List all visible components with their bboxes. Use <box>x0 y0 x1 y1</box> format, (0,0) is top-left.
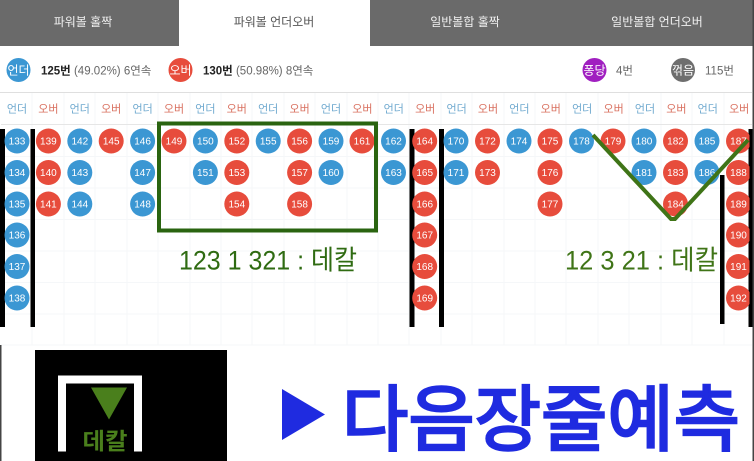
result balls: 154 <box>228 200 246 210</box>
result balls: 178 <box>573 136 590 148</box>
column headers <box>7 102 749 116</box>
result balls: 142 <box>71 136 89 148</box>
result balls: 169 <box>416 294 433 304</box>
result balls: 181 <box>636 168 653 179</box>
icon: green down triangle <box>91 388 127 420</box>
result balls: 187 <box>730 136 747 148</box>
icon: blue play arrow <box>282 389 325 440</box>
result balls: 182 <box>667 136 684 148</box>
badge: 언더 <box>6 58 30 82</box>
icon: white bracket <box>58 376 142 452</box>
column headers: 오버 <box>352 102 373 116</box>
label: 데칼: 데칼 <box>82 428 128 454</box>
result balls: 192 <box>730 294 747 304</box>
column headers: 언더 <box>258 102 278 116</box>
result balls: 174 <box>511 136 528 148</box>
column headers: 언더 <box>698 102 718 116</box>
column headers: 오버 <box>289 102 310 116</box>
summary row <box>6 58 734 82</box>
result balls: 173 <box>479 168 496 179</box>
result balls: 138 <box>9 294 26 304</box>
column headers: 언더 <box>635 102 655 116</box>
result balls: 161 <box>354 136 371 148</box>
tab: 일반볼합 언더오버: 일반볼합 언더오버 <box>611 15 703 29</box>
result balls: 156 <box>291 136 308 148</box>
result balls: 141 <box>40 200 57 210</box>
result balls: 163 <box>385 168 402 179</box>
column headers: 언더 <box>7 102 27 116</box>
result balls: 148 <box>134 200 151 210</box>
result balls: 158 <box>291 200 308 210</box>
result balls: 146 <box>134 136 151 148</box>
column headers: 오버 <box>478 102 498 116</box>
badge: 꺾음: 꺾음 <box>672 64 694 78</box>
result balls <box>4 128 751 310</box>
column headers: 오버 <box>101 102 121 116</box>
result balls: 185 <box>699 136 716 148</box>
column headers: 오버 <box>666 102 687 116</box>
green V mark <box>593 135 748 219</box>
decal icon panel <box>35 350 227 461</box>
annotation: 123 1 321 데칼: 123 1 321 : 데칼 <box>179 246 357 276</box>
stat: 오버 count: 130번 (50.98%) 8연속 <box>203 64 313 78</box>
result balls: 136 <box>9 230 26 242</box>
result balls: 137 <box>9 262 26 273</box>
result balls: 133 <box>9 136 26 148</box>
column headers: 언더 <box>321 102 341 116</box>
column headers: 언더 <box>132 102 153 116</box>
bar covers over right-hand balls <box>720 129 754 327</box>
green highlight box <box>159 124 376 230</box>
result balls: 153 <box>228 168 246 179</box>
badge: 퐁당 <box>582 58 606 82</box>
tab: 파워볼 언더오버: 파워볼 언더오버 <box>234 15 314 29</box>
badge: 오버: 오버 <box>169 64 192 78</box>
result balls: 183 <box>667 168 684 179</box>
result balls: 157 <box>291 168 308 179</box>
annotation: 12 3 21 데칼: 12 3 21 : 데칼 <box>565 246 718 276</box>
result balls: 172 <box>479 136 496 148</box>
result balls: 162 <box>385 136 402 148</box>
result balls: 149 <box>166 136 183 148</box>
result balls: 143 <box>71 168 89 179</box>
badge: 언더: 언더 <box>7 64 30 78</box>
result balls: 147 <box>134 168 151 179</box>
result balls: 177 <box>542 200 559 210</box>
column headers: 오버 <box>227 102 247 116</box>
column headers: 언더 <box>384 102 404 116</box>
result balls: 150 <box>197 136 214 148</box>
badge: 꺾음 <box>671 58 695 82</box>
tab: 파워볼 홀짝: 파워볼 홀짝 <box>54 15 112 29</box>
result balls: 155 <box>260 136 277 148</box>
result balls: 189 <box>730 200 747 210</box>
result balls: 175 <box>542 136 559 148</box>
result balls: 184 <box>667 200 684 210</box>
result balls: 139 <box>40 136 57 148</box>
result balls: 151 <box>197 168 214 179</box>
result balls: 168 <box>416 262 433 273</box>
tab: 일반볼합 홀짝: 일반볼합 홀짝 <box>430 15 500 29</box>
tab bar <box>0 0 754 46</box>
result balls: 180 <box>636 136 653 148</box>
column headers: 언더 <box>70 102 90 116</box>
result balls: 171 <box>448 168 465 179</box>
column headers: 오버 <box>603 102 624 116</box>
column headers: 오버 <box>729 102 749 116</box>
stat: 퐁당 count: 4번 <box>616 64 633 78</box>
result balls: 186 <box>699 168 716 179</box>
result balls: 170 <box>448 136 465 148</box>
result balls: 145 <box>103 136 120 148</box>
column headers: 오버 <box>415 102 435 116</box>
black divider bars <box>0 129 754 327</box>
column headers: 언더 <box>509 102 530 116</box>
column headers: 언더 <box>446 102 467 116</box>
result balls: 140 <box>40 168 57 179</box>
result balls: 164 <box>416 136 433 148</box>
result balls: 166 <box>416 200 433 210</box>
result balls: 134 <box>9 168 26 179</box>
column headers: 오버 <box>38 102 59 116</box>
result balls: 152 <box>228 136 246 148</box>
column headers: 언더 <box>572 102 592 116</box>
column headers: 언더 <box>195 102 216 116</box>
result balls: 167 <box>416 230 433 242</box>
result balls: 179 <box>605 136 622 148</box>
heading: 다음장줄예측: 다음장줄예측 <box>342 381 740 461</box>
badge: 퐁당: 퐁당 <box>583 64 606 78</box>
result balls: 176 <box>542 168 559 179</box>
result balls: 188 <box>730 168 747 179</box>
result balls: 135 <box>9 200 26 210</box>
stat: 언더 count: 125번 (49.02%) 6연속 <box>41 64 151 78</box>
result balls: 144 <box>71 200 89 210</box>
stat: 꺾음 count: 115번 <box>705 64 734 78</box>
badge: 오버 <box>168 58 192 82</box>
result balls: 159 <box>323 136 340 148</box>
column headers: 오버 <box>164 102 184 116</box>
result balls: 165 <box>416 168 433 179</box>
column headers: 오버 <box>541 102 561 116</box>
result balls: 160 <box>323 168 340 179</box>
result balls: 191 <box>730 262 747 273</box>
result balls: 190 <box>730 230 747 242</box>
